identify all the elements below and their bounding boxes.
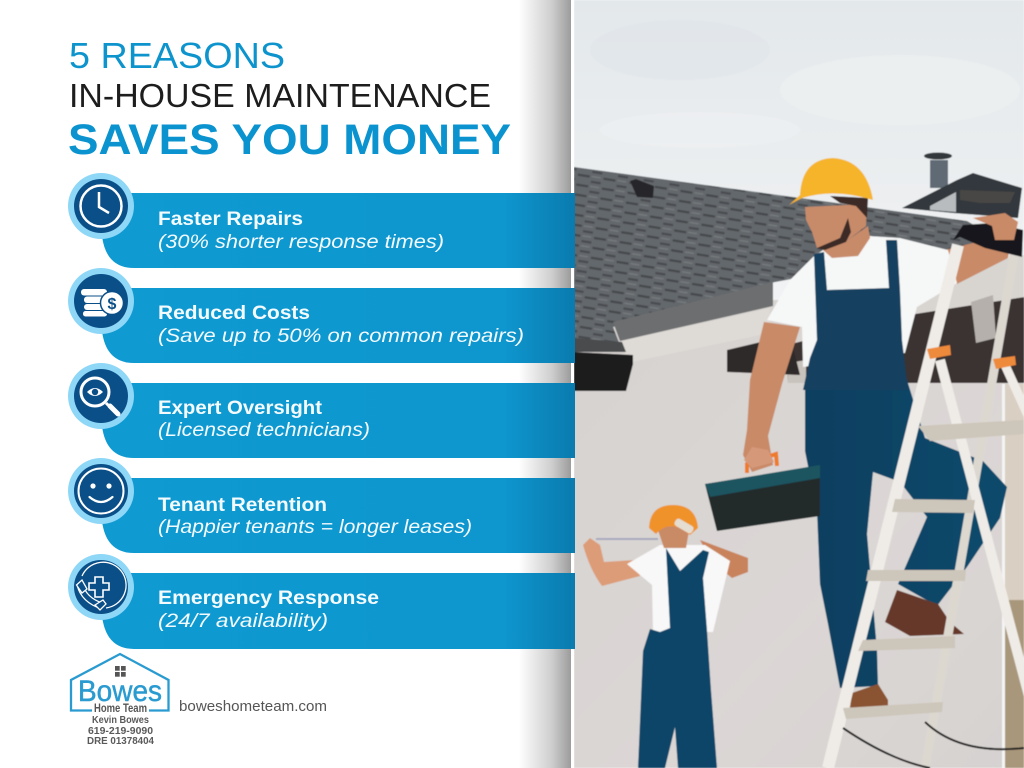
- black tape on ladder top: [953, 223, 1023, 257]
- reason 2: reduced costs: [68, 268, 575, 363]
- logo wordmark: Bowes: [78, 675, 162, 708]
- neck: [823, 226, 870, 258]
- overalls: [638, 548, 717, 768]
- detail: (30% shorter response times): [158, 232, 444, 253]
- banner: [102, 573, 575, 649]
- heading: Emergency Response: [158, 588, 379, 609]
- heading: Faster Repairs: [158, 209, 303, 230]
- logo: Bowes Home Team: [71, 654, 168, 747]
- icon: smiley face: [68, 458, 134, 524]
- arms: [583, 538, 640, 586]
- icon: clock: [68, 173, 134, 239]
- lower boot: [850, 684, 888, 708]
- hard hat: [789, 158, 873, 205]
- main worker hand on ladder: [973, 213, 1018, 240]
- left panel background: [0, 0, 574, 768]
- reason 4: tenant retention: [68, 458, 575, 553]
- title line 1: 5 REASONS: [69, 35, 285, 76]
- ladder strap: [843, 722, 1024, 768]
- logo subtitle: Home Team: [94, 703, 147, 715]
- detail: (Save up to 50% on common repairs): [158, 326, 524, 347]
- shirt: [627, 545, 730, 632]
- detail: (24/7 availability): [158, 611, 328, 632]
- logo house outline: [71, 654, 168, 710]
- heading: Tenant Retention: [158, 495, 327, 516]
- left fascia and gutter: [574, 282, 773, 391]
- wall: [574, 300, 1024, 768]
- sky: [574, 0, 1024, 300]
- detail: (Licensed technicians): [158, 420, 370, 441]
- icon: phone and medical cross: [68, 554, 134, 620]
- website url: boweshometeam.com: [179, 699, 327, 715]
- heading: Expert Oversight: [158, 398, 323, 419]
- logo window: [115, 666, 126, 677]
- title line 3: SAVES YOU MONEY: [68, 116, 511, 164]
- shirt: [767, 236, 957, 367]
- banner: [102, 288, 575, 363]
- main worker raised arm: [945, 232, 1012, 284]
- orange clips: [927, 345, 1016, 369]
- icon: coins and dollar: $: [108, 296, 117, 313]
- head: [805, 204, 867, 248]
- upper boot: [885, 590, 964, 636]
- right fascia and soffit: [727, 255, 1024, 383]
- chimney and far house: [902, 152, 1022, 218]
- roof shingles: [574, 167, 1000, 345]
- reason 1: faster repairs: [68, 173, 575, 268]
- banner: [102, 193, 575, 268]
- helmet: [649, 505, 698, 535]
- overalls bib: [803, 240, 908, 390]
- reason 3: expert oversight: [68, 363, 575, 458]
- steps: [843, 420, 1024, 719]
- ladder: [828, 223, 1024, 768]
- detail: (Happier tenants = longer leases): [158, 517, 472, 538]
- agent licence: DRE 01378404: [87, 735, 154, 747]
- icon: magnifier with eye: [68, 363, 134, 429]
- main worker legs: [805, 380, 1007, 688]
- banner: [102, 478, 575, 553]
- banner: [102, 383, 575, 458]
- hair and beard: [817, 196, 868, 250]
- photo: two workers on a roof and ladder: [574, 0, 1024, 768]
- wall post: [1002, 384, 1024, 768]
- head: [657, 525, 690, 548]
- agent name: Kevin Bowes: [92, 714, 149, 726]
- heading: Reduced Costs: [158, 303, 310, 324]
- roof vent: [630, 179, 654, 198]
- agent phone: 619-219-9090: [88, 725, 153, 737]
- icon: coins and dollar: [68, 268, 134, 334]
- title: [68, 35, 511, 164]
- rails: [828, 245, 1024, 768]
- worker in background: [583, 505, 748, 768]
- toolbox: [705, 447, 820, 531]
- reason 5: emergency response: [68, 554, 575, 649]
- tape measure: [596, 538, 658, 540]
- title line 2: IN-HOUSE MAINTENANCE: [69, 77, 491, 114]
- main worker arm and hand holding toolbox: [743, 322, 800, 472]
